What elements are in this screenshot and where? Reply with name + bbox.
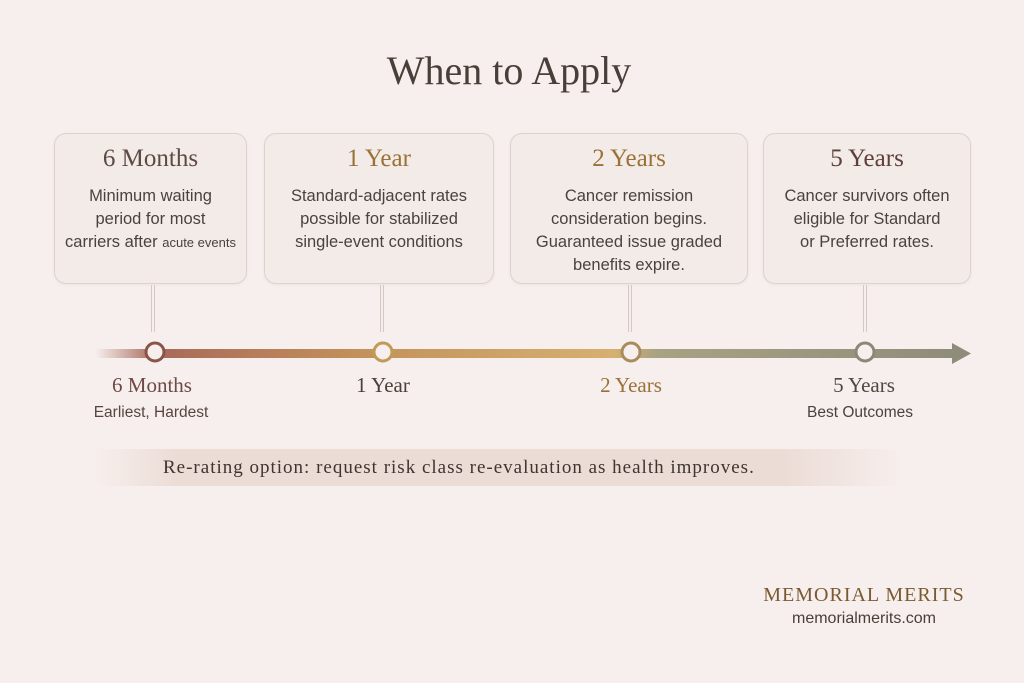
text: 1 Year (356, 373, 410, 397)
panel: 6 months: 6 Months (103, 145, 198, 172)
footer brand: memorialmerits.com (792, 610, 936, 627)
banner: Re-rating option: request risk class re-evaluation as health improves. (163, 457, 755, 478)
panel: 2 years: Guaranteed issue graded (536, 233, 722, 251)
text: Earliest, Hardest (94, 404, 208, 421)
footer brand: MEMORIAL MERITS (763, 584, 965, 606)
text: Best Outcomes (807, 404, 913, 421)
panel: 1 year (264, 133, 494, 284)
text: 2 Years (600, 373, 662, 397)
panel: 5 years: eligible for Standard (794, 210, 940, 228)
footer brand (763, 584, 965, 627)
panel: 6 months (54, 133, 247, 284)
panel: 2 years: consideration begins. (551, 210, 707, 228)
text: 5 Years (833, 373, 895, 397)
panel: 5 years: or Preferred rates. (800, 233, 934, 251)
panel: 2 years: benefits expire. (573, 256, 685, 274)
labels: 6 Months (112, 373, 192, 397)
panel: 6 months: carriers after acute events (65, 233, 236, 251)
panel: 6 months: period for most (95, 210, 206, 228)
panel: 5 years (763, 133, 971, 284)
panel: 2 years: 2 Years (592, 145, 666, 172)
panel: 6 months: Minimum waiting (89, 187, 212, 205)
title: When to Apply (387, 48, 631, 93)
banner (95, 449, 905, 486)
panel: 1 year: possible for stabilized (300, 210, 458, 228)
panel: 5 years: 5 Years (830, 145, 904, 172)
panel: 2 years: Cancer remission (565, 187, 693, 205)
panel: 5 years: Cancer survivors often (784, 187, 950, 205)
panel: 2 years (510, 133, 748, 284)
panel: 1 year: single-event conditions (295, 233, 463, 251)
timeline arrow (98, 342, 971, 364)
panel: 1 year: 1 Year (347, 145, 411, 172)
panel: 1 year: Standard-adjacent rates (291, 187, 467, 205)
